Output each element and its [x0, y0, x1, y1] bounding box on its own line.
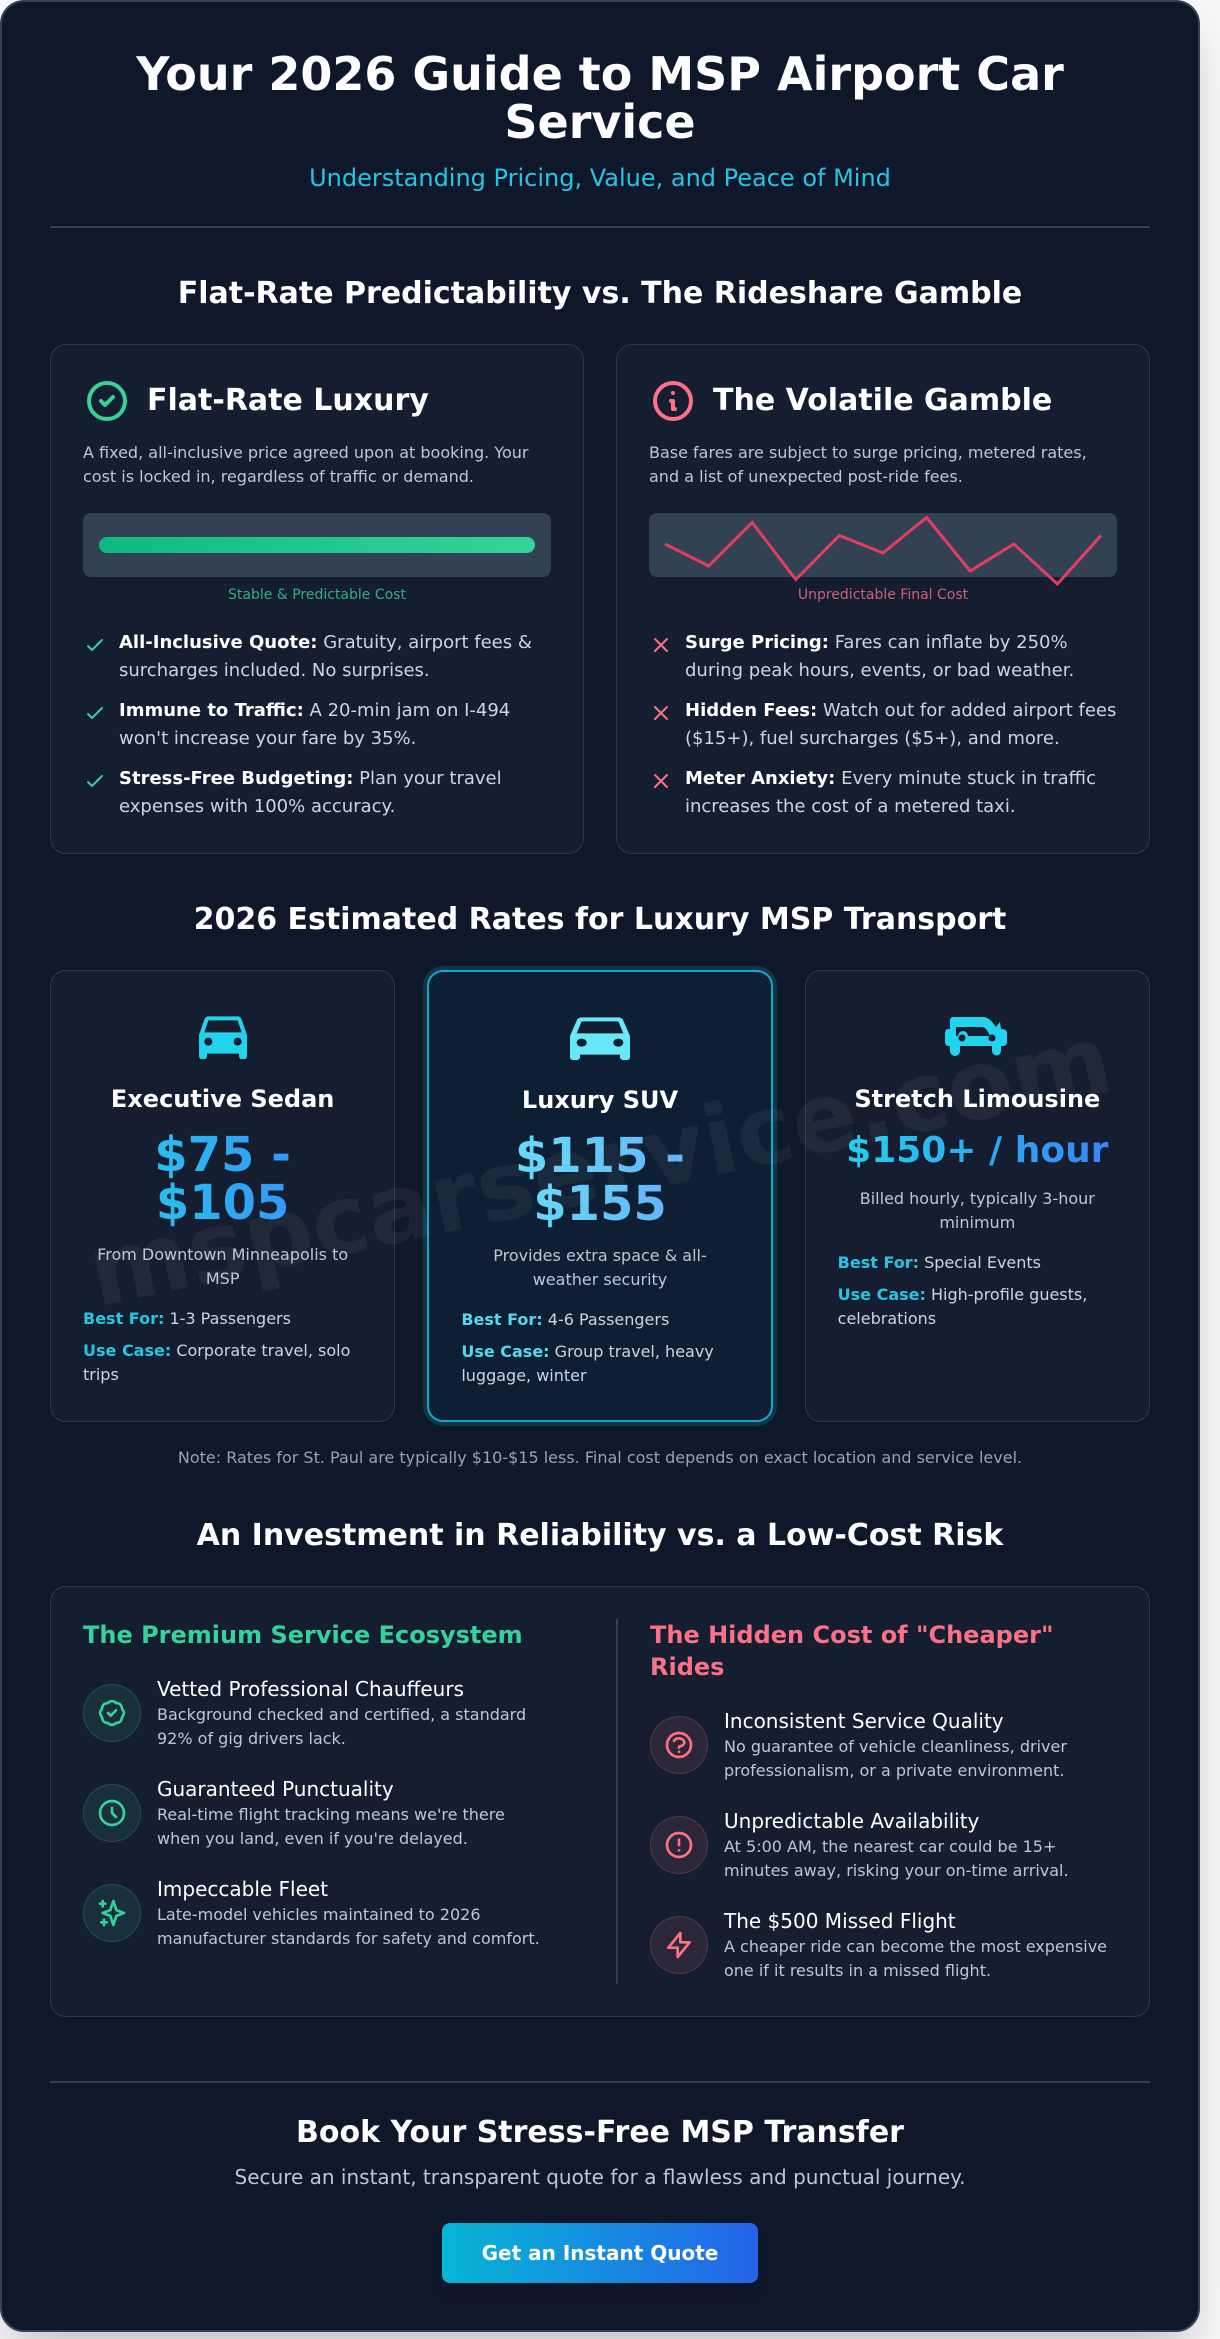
item text: professionalism, or a private environment.	[724, 1761, 1064, 1780]
chart: volatile cost line	[649, 513, 1117, 577]
best for: Best For: 4-6 Passengers	[461, 1310, 669, 1329]
item text: one if it results in a missed flight.	[724, 1961, 991, 1980]
description: Base fares are subject to surge pricing, metered rates,	[649, 443, 1087, 462]
item text: Background checked and certified, a standard	[157, 1705, 526, 1724]
icon: badge check	[83, 1684, 141, 1742]
benefit: immune to traffic	[87, 700, 510, 749]
section heading: rates: 2026 Estimated Rates for Luxury MSP Transport	[194, 902, 1006, 937]
heading text: Flat-Rate Luxury	[147, 383, 429, 418]
subtitle: Understanding Pricing, Value, and Peace of Mind	[309, 164, 891, 192]
icon: info circle	[653, 381, 693, 421]
item text	[724, 1907, 1107, 1983]
icon: sedan	[199, 1016, 247, 1059]
price	[461, 1132, 739, 1228]
item text: Real-time flight tracking means we're there	[157, 1805, 505, 1824]
tier description: From Downtown Minneapolis to	[97, 1245, 348, 1264]
benefit: stress-free budgeting	[87, 768, 502, 817]
tier name: Luxury SUV	[522, 1086, 678, 1114]
column heading: The Hidden Cost of "Cheaper"	[650, 1621, 1053, 1649]
icon: limousine	[945, 1017, 1007, 1056]
price	[83, 1131, 362, 1227]
tier description: MSP	[206, 1269, 239, 1288]
panel: luxury suv (featured)	[427, 970, 773, 1422]
heading text: The Volatile Gamble	[713, 383, 1052, 418]
item text: manufacturer standards for safety and comfort.	[157, 1929, 540, 1948]
item text: Guaranteed Punctuality	[157, 1777, 394, 1801]
chart caption: Stable & Predictable Cost	[228, 587, 406, 603]
comparison panels	[50, 344, 1150, 854]
watermark: mspcarservice.com	[79, 1003, 1121, 1329]
use case: Use Case: Group travel, heavy	[461, 1342, 714, 1361]
price: $115 -	[515, 1128, 685, 1184]
icon: clock	[83, 1784, 141, 1842]
panel heading: volatile gamble	[653, 381, 1052, 421]
item: missed flight	[650, 1907, 1117, 1983]
price: $150+ / hour	[846, 1130, 1108, 1171]
item: impeccable fleet	[83, 1877, 540, 1948]
price: $155	[533, 1176, 667, 1232]
item text: A cheaper ride can become the most expensive	[724, 1937, 1107, 1956]
benefit: stress-free budgeting: Stress-Free Budgeting: Plan your travel	[119, 768, 502, 789]
panel heading: flat-rate luxury	[87, 381, 429, 421]
panel: executive sedan	[50, 970, 395, 1422]
icon: suv	[570, 1017, 630, 1060]
benefits list	[87, 632, 532, 817]
column heading	[650, 1621, 1053, 1681]
chart caption: Unpredictable Final Cost	[798, 587, 968, 603]
cta button: Get an Instant Quote	[482, 2241, 718, 2265]
item: vetted chauffeurs	[83, 1677, 526, 1748]
title: Service	[504, 95, 696, 149]
tier description	[860, 1189, 1095, 1232]
use case	[83, 1341, 350, 1384]
benefit: immune to traffic: Immune to Traffic: A 20-min jam on I-494	[119, 700, 510, 721]
drawback: hidden fees: ($15+), fuel surcharges ($5+), and more.	[685, 728, 1060, 749]
icon: lightning bolt	[650, 1916, 708, 1974]
drawback: meter anxiety: increases the cost of a metered taxi.	[685, 796, 1016, 817]
item text: No guarantee of vehicle cleanliness, driver	[724, 1737, 1067, 1756]
item text	[724, 1709, 1067, 1780]
benefit: all-inclusive quote	[87, 632, 532, 681]
drawback: meter anxiety: Meter Anxiety: Every minute stuck in traffic	[685, 768, 1096, 789]
tier description: Provides extra space & all-	[493, 1246, 707, 1265]
item text: minutes away, risking your on-time arrival.	[724, 1861, 1069, 1880]
icon: exclamation circle	[650, 1816, 708, 1874]
item text	[157, 1877, 540, 1948]
tier description: minimum	[939, 1213, 1015, 1232]
tier description: weather security	[533, 1270, 667, 1289]
tier name: Stretch Limousine	[854, 1085, 1100, 1113]
column: hidden cost of cheaper rides	[650, 1621, 1107, 1980]
drawback: meter anxiety	[654, 768, 1096, 817]
item text: Late-model vehicles maintained to 2026	[157, 1905, 481, 1924]
price: $105	[156, 1175, 289, 1231]
best for: Best For: Special Events	[838, 1253, 1041, 1272]
description	[83, 443, 528, 486]
cta heading: Book Your Stress-Free MSP Transfer	[296, 2115, 904, 2150]
drawback: hidden fees	[654, 700, 1116, 749]
drawback: surge pricing: during peak hours, events, or bad weather.	[685, 660, 1074, 681]
pricing cards	[50, 966, 1150, 1426]
use case: Use Case: Corporate travel, solo	[83, 1341, 350, 1360]
description	[649, 443, 1087, 486]
icon: question circle	[650, 1716, 708, 1774]
tier name: Executive Sedan	[111, 1085, 334, 1113]
drawback: surge pricing	[654, 632, 1074, 681]
panel: the volatile gamble	[616, 344, 1150, 854]
drawback: surge pricing: Surge Pricing: Fares can inflate by 250%	[685, 632, 1068, 653]
cta button	[442, 2223, 758, 2283]
item text	[724, 1807, 1069, 1883]
item text: Unpredictable Availability	[724, 1809, 979, 1833]
item: inconsistent quality	[650, 1709, 1067, 1780]
item text	[157, 1677, 526, 1748]
item: guaranteed punctuality	[83, 1777, 505, 1848]
tier description: Billed hourly, typically 3-hour	[860, 1189, 1095, 1208]
use case: trips	[83, 1365, 119, 1384]
section heading: reliability: An Investment in Reliability vs. a Low-Cost Risk	[197, 1518, 1003, 1553]
pricing note: Note: Rates for St. Paul are typically $10-$15 less. Final cost depends on exact location and service level.	[178, 1448, 1022, 1467]
benefit: all-inclusive quote: All-Inclusive Quote: Gratuity, airport fees &	[119, 632, 532, 653]
drawbacks list	[654, 632, 1116, 817]
best for: Best For: 1-3 Passengers	[83, 1309, 291, 1328]
item text: when you land, even if you're delayed.	[157, 1829, 468, 1848]
header	[50, 50, 1150, 228]
use case	[838, 1285, 1087, 1328]
icon: sparkles	[83, 1884, 141, 1942]
tier description	[97, 1245, 348, 1288]
tier description	[493, 1246, 707, 1289]
use case: luggage, winter	[461, 1366, 587, 1385]
icon: check circle	[87, 381, 127, 421]
item text: Inconsistent Service Quality	[724, 1709, 1004, 1733]
column: premium service ecosystem	[83, 1621, 540, 1948]
item text: Impeccable Fleet	[157, 1877, 328, 1901]
panel: flat-rate luxury	[50, 344, 584, 854]
benefit: all-inclusive quote: surcharges included. No surprises.	[119, 660, 430, 681]
description: A fixed, all-inclusive price agreed upon at booking. Your	[83, 443, 528, 462]
column heading: Rides	[650, 1653, 724, 1681]
benefit: stress-free budgeting: expenses with 100% accuracy.	[119, 796, 395, 817]
item: unpredictable availability	[650, 1807, 1117, 1883]
item text: 92% of gig drivers lack.	[157, 1729, 346, 1748]
use case: celebrations	[838, 1309, 936, 1328]
panel: stretch limousine	[805, 970, 1150, 1422]
section heading: flat-rate vs rideshare: Flat-Rate Predictability vs. The Rideshare Gamble	[178, 276, 1022, 311]
use case	[461, 1342, 714, 1385]
benefit: immune to traffic: won't increase your fare by 35%.	[119, 728, 416, 749]
description: and a list of unexpected post-ride fees.	[649, 467, 963, 486]
use case: Use Case: High-profile guests,	[838, 1285, 1087, 1304]
column heading: The Premium Service Ecosystem	[83, 1621, 523, 1649]
item text: Vetted Professional Chauffeurs	[157, 1677, 464, 1701]
price: $75 -	[154, 1127, 291, 1183]
chart: stable cost bar	[83, 513, 551, 577]
call to action	[50, 2081, 1150, 2283]
description: cost is locked in, regardless of traffic or demand.	[83, 467, 474, 486]
cta text: Secure an instant, transparent quote for a flawless and punctual journey.	[235, 2165, 965, 2189]
drawback: hidden fees: Hidden Fees: Watch out for added airport fees	[685, 700, 1116, 721]
title: Your 2026 Guide to MSP Airport Car	[136, 47, 1064, 101]
panel: reliability comparison	[50, 1586, 1150, 2017]
item text	[157, 1777, 505, 1848]
item text: The $500 Missed Flight	[724, 1909, 956, 1933]
title	[136, 47, 1064, 149]
item text: At 5:00 AM, the nearest car could be 15+	[724, 1837, 1056, 1856]
